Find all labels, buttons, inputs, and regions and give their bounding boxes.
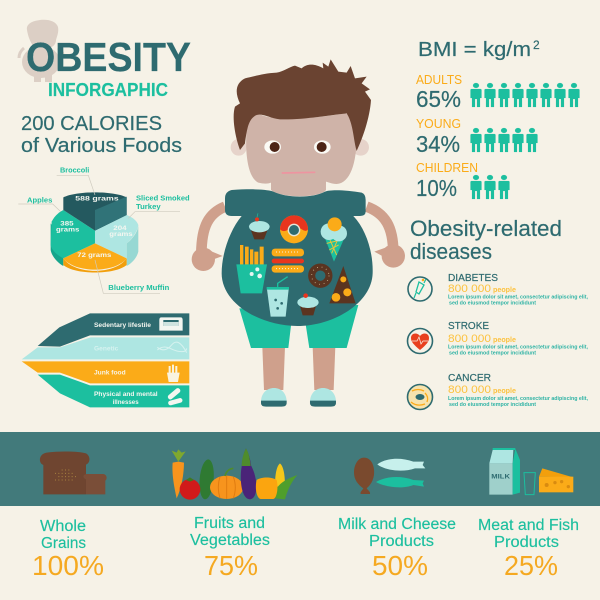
BMI formula: 2 xyxy=(533,38,540,52)
arrow: genetic: Genetic xyxy=(94,345,119,352)
heading: 200 calories: 200 CALORIES xyxy=(21,113,162,135)
disease: diabetes xyxy=(408,272,589,306)
disease: stroke: sed do eiusmod tempor incididunt xyxy=(449,350,536,356)
disease: stroke: Lorem ipsum dolor sit amet, consectetur adipiscing elit, xyxy=(448,344,589,350)
category: fruits and vegetables: 75% xyxy=(204,550,258,581)
category: meat and fish products: 25% xyxy=(504,550,558,581)
arrow: genetic xyxy=(22,337,189,359)
category: milk and cheese products xyxy=(338,516,456,581)
icon row: adults people xyxy=(470,83,580,107)
disease: diabetes: Lorem ipsum dolor sit amet, consectetur adipiscing elit, xyxy=(448,294,589,300)
disease: stroke: people xyxy=(493,335,516,344)
category: whole grains xyxy=(32,518,104,581)
food: drink xyxy=(267,277,289,317)
disease: diabetes: people xyxy=(493,285,516,294)
arrow: junk food: Junk food xyxy=(94,370,126,377)
category: meat and fish products: Products xyxy=(494,534,559,551)
category: whole grains: Whole xyxy=(40,518,86,535)
head and hair xyxy=(231,59,371,196)
disease: cancer: sed do eiusmod tempor incididunt xyxy=(449,402,536,408)
chart labels: Broccoli xyxy=(60,168,89,175)
stat: children: 10% xyxy=(416,175,457,201)
chart labels: Turkey xyxy=(136,204,161,211)
arrow: sedentary lifestyle: Sedentary lifestile xyxy=(94,322,151,329)
arrow: physical and mental illnesses: illnesses xyxy=(113,399,139,406)
category: fruits and vegetables xyxy=(190,515,270,581)
disease: stroke: STROKE xyxy=(448,320,489,332)
disease: stroke: 800 000 xyxy=(448,333,491,345)
food: cupcake xyxy=(249,213,270,239)
food: pizza slice xyxy=(329,266,356,303)
stat: children: CHILDREN xyxy=(416,161,478,175)
icon: vegetables xyxy=(172,448,297,500)
disease: cancer: CANCER xyxy=(448,372,491,384)
disease: cancer: Lorem ipsum dolor sit amet, consectetur adipiscing elit, xyxy=(448,396,589,402)
stat: adults: ADULTS xyxy=(416,73,462,87)
chart slice values: 588 grams xyxy=(75,197,120,203)
chart slice values: grams xyxy=(109,232,134,238)
icon: cancer cell xyxy=(408,384,432,410)
icon: syringe xyxy=(408,277,432,301)
icon row: children people xyxy=(470,175,510,199)
stat: young: 34% xyxy=(416,131,460,157)
category: whole grains: 100% xyxy=(32,550,104,581)
icon: heart xyxy=(408,328,432,354)
body, clothes and food xyxy=(192,189,405,407)
chart slice values: grams xyxy=(56,227,80,233)
chart: four causes arrows xyxy=(22,313,189,407)
category: fruits and vegetables: Fruits and xyxy=(194,515,265,532)
arrow: sedentary lifestyle xyxy=(38,313,189,347)
chart labels xyxy=(27,168,190,292)
illustration: overweight boy xyxy=(192,59,405,407)
food: chocolate donut xyxy=(312,267,329,284)
icon: pale boy silhouette behind title xyxy=(19,20,63,82)
icon: milk carton, glass and cheese xyxy=(489,448,573,495)
chart labels: Sliced Smoked xyxy=(136,195,190,202)
disease: diabetes: DIABETES xyxy=(448,272,498,284)
panel: food band xyxy=(0,432,600,506)
category: milk and cheese products: Milk and Cheese xyxy=(338,516,456,533)
category: milk and cheese products: 50% xyxy=(372,550,428,581)
disease: stroke xyxy=(408,320,589,356)
heading: obesity-related diseases: Obesity-related xyxy=(410,216,562,241)
icon: milk carton, glass and cheese: MILK xyxy=(491,474,510,481)
subtitle: INFORGAPHIC xyxy=(48,79,168,100)
arrow: physical and mental illnesses xyxy=(38,375,189,407)
disease: diabetes: sed do eiusmod tempor incididunt xyxy=(449,300,536,306)
food: cupcake two xyxy=(297,293,319,315)
disease: cancer xyxy=(408,372,589,410)
chart slice values: 204 xyxy=(113,226,128,232)
disease: cancer: 800 000 xyxy=(448,384,491,396)
icon row: young people xyxy=(470,128,538,152)
food: fries xyxy=(236,245,267,293)
category: meat and fish products: Meat and Fish xyxy=(478,517,579,534)
icon: chicken leg and fish xyxy=(354,458,425,494)
chart labels: Apples xyxy=(27,197,52,204)
stat: young xyxy=(416,117,538,157)
food: glazed donut xyxy=(280,215,308,243)
stat: adults: 65% xyxy=(416,86,461,112)
heading: 200 calories xyxy=(21,113,182,157)
title: OBESITY xyxy=(26,34,191,80)
stat: children xyxy=(416,161,510,201)
category: whole grains: Grains xyxy=(41,535,86,552)
icon: bread xyxy=(40,451,107,494)
heading: obesity-related diseases xyxy=(410,216,562,264)
arrow: physical and mental illnesses: Physical and mental xyxy=(94,391,158,398)
category: fruits and vegetables: Vegetables xyxy=(190,532,270,549)
category: meat and fish products xyxy=(478,517,579,581)
arrow: junk food xyxy=(22,361,189,383)
chart slice values: 72 grams xyxy=(77,253,112,259)
food: ice cream cone xyxy=(321,217,347,262)
BMI formula: BMI = kg/m xyxy=(418,39,531,61)
chart slice values: 385 xyxy=(60,221,75,227)
chart slice values xyxy=(56,197,134,259)
category: milk and cheese products: Products xyxy=(369,533,434,550)
stat: adults xyxy=(416,73,580,112)
disease: diabetes: 800 000 xyxy=(448,283,491,295)
disease: cancer: people xyxy=(493,386,516,395)
heading: obesity-related diseases: diseases xyxy=(410,239,492,264)
food: burger xyxy=(272,249,304,273)
chart: 3D pie of foods xyxy=(18,168,190,293)
chart labels: Blueberry Muffin xyxy=(108,285,169,292)
heading: 200 calories: of Various Foods xyxy=(21,135,182,157)
stat: young: YOUNG xyxy=(416,117,461,131)
